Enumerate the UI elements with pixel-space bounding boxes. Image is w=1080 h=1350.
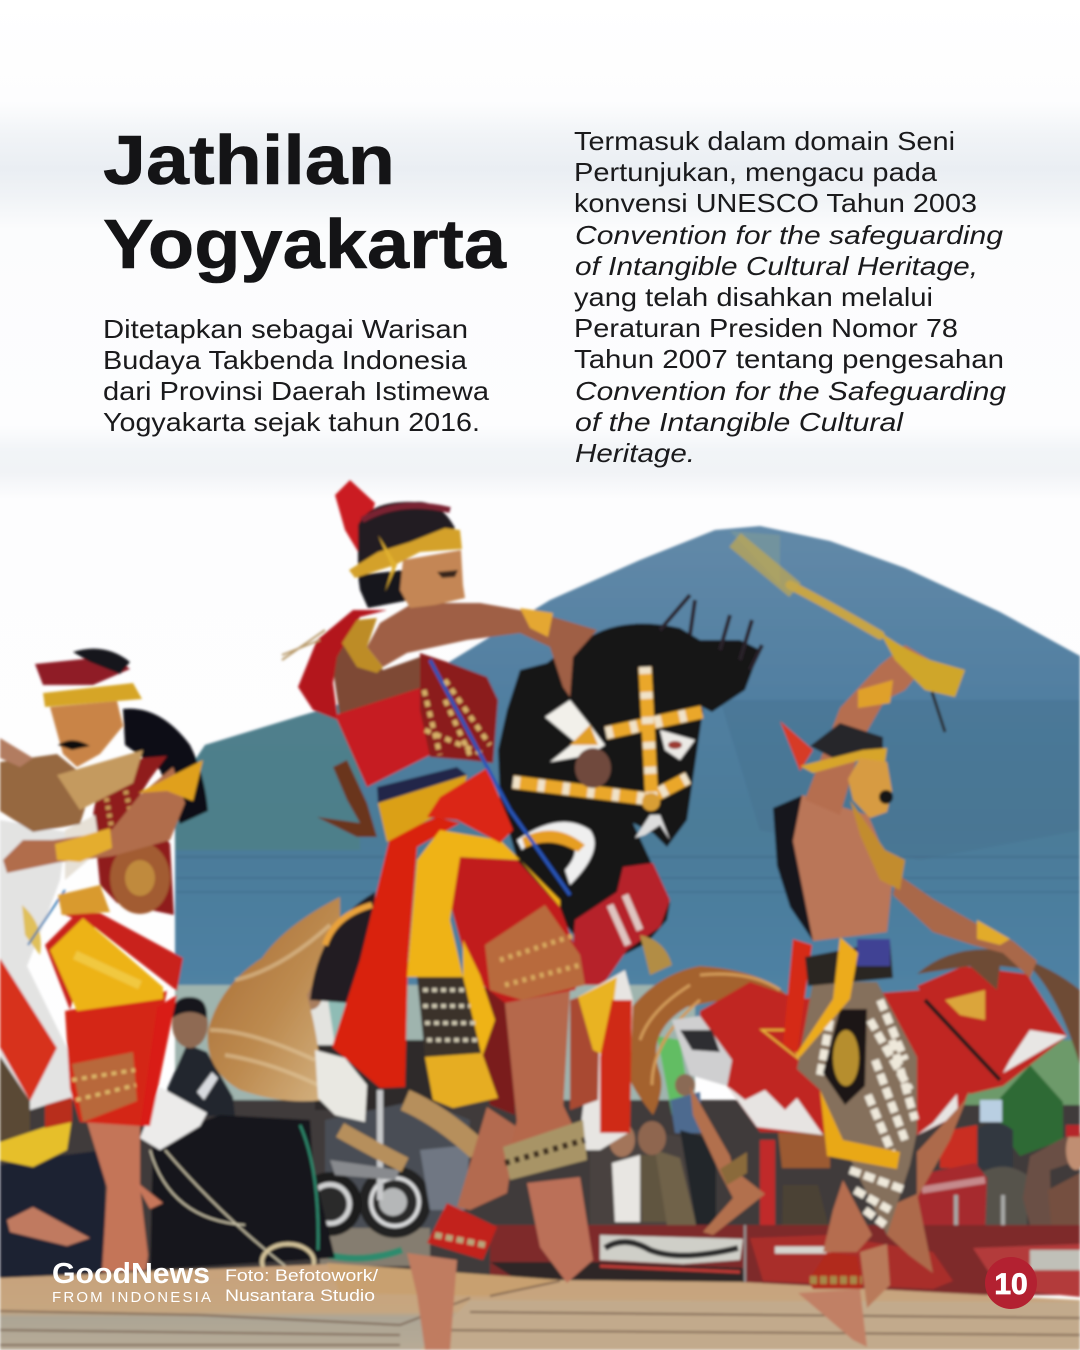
whip and tassel <box>790 585 880 635</box>
red strip <box>140 995 177 1126</box>
mountain <box>175 526 1080 1075</box>
page number badge: 10 <box>994 1268 1028 1301</box>
man with white shirt <box>296 1000 335 1045</box>
logo: GoodNews from Indonesia: FROM INDONESIA <box>52 1289 211 1306</box>
right description text: of Intangible Cultural Heritage, <box>575 251 978 281</box>
gold belt <box>58 885 110 915</box>
right description text: yang telah disahkan melalui <box>574 282 933 312</box>
embroidered vest <box>420 653 498 763</box>
left dancer with white kuda lumping <box>0 649 208 1272</box>
hair <box>123 709 208 824</box>
chest <box>65 815 100 880</box>
right horse head <box>917 966 1067 1094</box>
red bodice <box>335 688 430 787</box>
yellow sash lower <box>820 1090 900 1169</box>
red cape <box>298 610 387 720</box>
red sash <box>783 939 812 1053</box>
yellow harness <box>513 667 702 803</box>
page number badge <box>985 1257 1037 1309</box>
left description text: Budaya Takbenda Indonesia <box>103 345 468 375</box>
red horse body <box>700 982 985 1135</box>
right description text: of the Intangible Cultural <box>575 407 904 437</box>
yellow cloth <box>50 918 163 1011</box>
hair <box>773 795 813 941</box>
hair <box>358 570 410 608</box>
red sash <box>332 817 460 1088</box>
speakers and motorcycles <box>0 1090 470 1280</box>
red hip panel <box>570 863 670 985</box>
logo: GoodNews from Indonesia <box>52 1258 211 1306</box>
right description text: Convention for the safeguarding <box>575 220 1004 250</box>
red top sash knot <box>427 768 513 843</box>
logo: GoodNews from Indonesia: GoodNews <box>52 1258 210 1290</box>
horse white face <box>672 1016 732 1086</box>
mid-ground crowd and instruments <box>0 982 1080 1297</box>
right description text: Peraturan Presiden Nomor 78 <box>574 313 958 343</box>
wrist band <box>520 608 553 637</box>
left description text: dari Provinsi Daerah Istimewa <box>103 376 490 406</box>
white horse <box>0 820 72 1167</box>
batik strip <box>417 977 482 1057</box>
legs <box>457 1107 517 1210</box>
left description text: Yogyakarta sejak tahun 2016. <box>103 407 480 437</box>
tree <box>1000 1065 1063 1156</box>
right description text: Tahun 2007 tentang pengesahan <box>574 344 1004 374</box>
photo credit: Nusantara Studio <box>225 1286 375 1305</box>
photo credit: Foto: Befotowork/ <box>225 1266 378 1285</box>
man in dark jacket <box>167 997 235 1116</box>
gold shoulder band <box>342 618 383 673</box>
gong <box>1023 1132 1080 1245</box>
keris handle <box>317 760 377 837</box>
face <box>848 758 892 818</box>
red trousers <box>450 857 583 1003</box>
title <box>103 121 507 283</box>
vest <box>93 756 174 915</box>
gamelan player <box>1048 1173 1080 1244</box>
belt <box>805 941 893 986</box>
red headdress <box>335 480 375 555</box>
mane <box>917 949 1080 1065</box>
horsehair fur <box>0 754 93 832</box>
anklets <box>503 1120 587 1180</box>
right description text: Heritage. <box>575 438 695 468</box>
hand <box>0 738 33 767</box>
hat and feather <box>780 721 813 771</box>
drum <box>917 1163 987 1232</box>
title: Yogyakarta <box>103 205 507 283</box>
right side cloth <box>570 970 633 1150</box>
red trousers <box>65 991 167 1126</box>
white cloth behind sash <box>315 1050 367 1122</box>
raised arm <box>805 645 930 815</box>
batik skirt <box>797 982 917 1235</box>
wooden stage floor <box>0 1263 1080 1350</box>
small patch <box>640 935 672 975</box>
hand behind <box>575 748 611 788</box>
red sash <box>60 913 183 991</box>
extended arm and hand <box>367 603 597 697</box>
decorated gamelan base <box>490 1140 1080 1297</box>
right description text <box>574 126 1007 468</box>
arm <box>3 767 185 873</box>
leg and feet <box>87 1122 148 1272</box>
right description text: konvensi UNESCO Tahun 2003 <box>574 188 977 218</box>
necklace <box>57 750 143 810</box>
gold belt and navy waistband <box>378 775 467 842</box>
motorcycles <box>298 1090 470 1266</box>
fringe under horse <box>778 1132 830 1168</box>
green banner <box>657 1036 690 1115</box>
gold panel <box>823 1009 867 1105</box>
white teeth <box>635 815 670 840</box>
face <box>50 701 123 767</box>
left description text <box>103 314 490 437</box>
tan horsehair tail, central kuda lumping <box>208 892 478 1165</box>
white lower pattern <box>727 1086 823 1135</box>
yellow sash <box>407 830 560 977</box>
white cloth <box>140 1087 207 1150</box>
photo credit <box>225 1266 378 1305</box>
yellow sash upper <box>797 937 858 1057</box>
dark red lining behind batik <box>455 975 515 1115</box>
hat <box>35 656 130 685</box>
right description text: Convention for the Safeguarding <box>575 376 1007 406</box>
torso <box>793 795 893 941</box>
central dancer with black kuda lumping <box>282 480 762 1350</box>
gold crown <box>349 528 462 578</box>
brown tail <box>619 966 787 1115</box>
black mane <box>585 595 762 712</box>
left description text: Ditetapkan sebagai Warisan <box>103 314 468 344</box>
feet and main leg <box>917 1098 967 1198</box>
white arc <box>517 822 594 885</box>
white wing mark <box>545 700 605 762</box>
black head wrap <box>358 502 455 565</box>
face <box>400 550 465 608</box>
right description text: Pertunjukan, mengacu pada <box>574 157 938 187</box>
armbands <box>138 760 203 801</box>
necklace <box>850 800 905 890</box>
title: Jathilan <box>103 121 395 199</box>
audience <box>590 1074 1027 1245</box>
right arm <box>893 874 1037 978</box>
blue string <box>430 660 570 895</box>
torso skin <box>333 627 420 717</box>
right description text: Termasuk dalam domain Seni <box>574 126 955 156</box>
black horse head and body <box>498 595 762 985</box>
right dancer with red kuda lumping <box>619 540 1080 1347</box>
back leg <box>690 1086 765 1235</box>
